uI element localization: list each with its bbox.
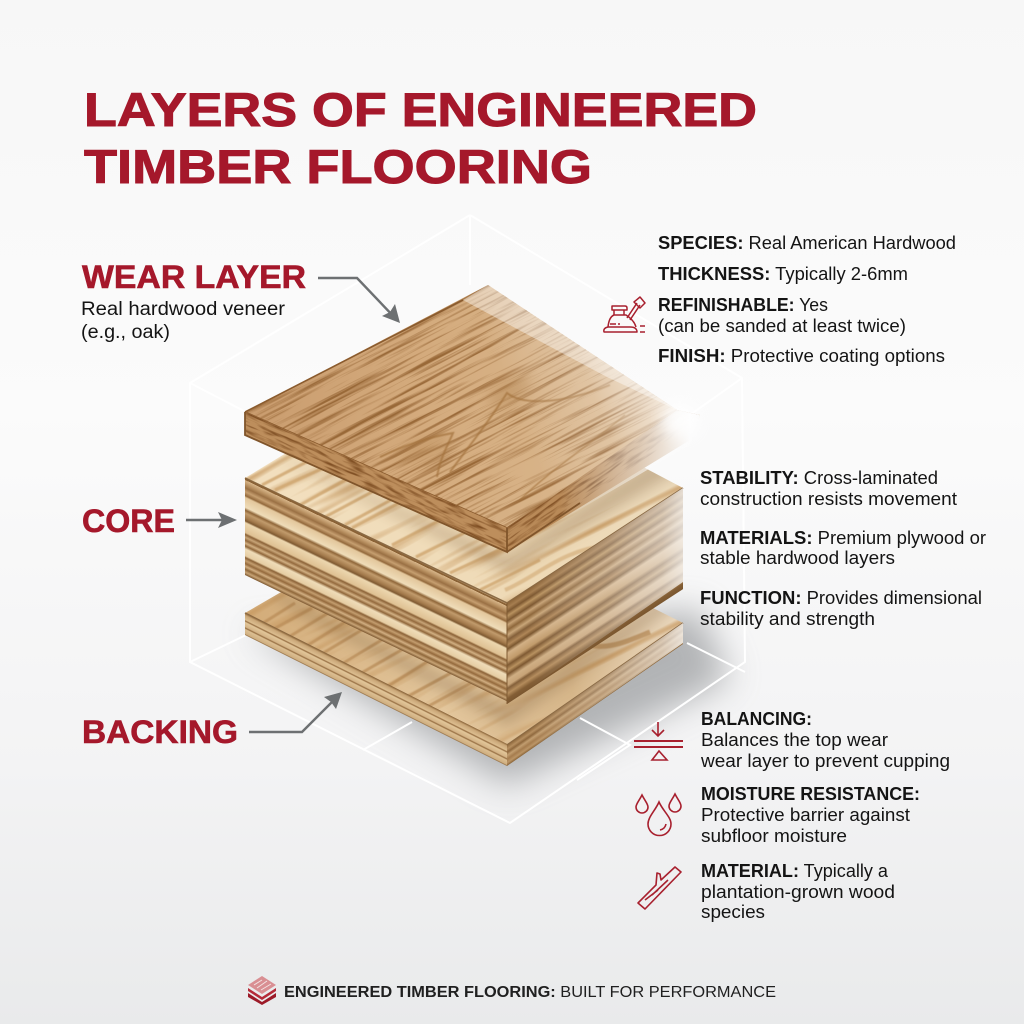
panel: backing details: wear layer to prevent cupping xyxy=(700,751,950,771)
panel: wear layer details: SPECIES: Real American Hardwood xyxy=(658,233,956,253)
label: core: CORE xyxy=(82,503,175,539)
panel: core details xyxy=(700,468,986,629)
panel: core details: stable hardwood layers xyxy=(700,548,895,568)
panel: wear layer details: (can be sanded at least twice) xyxy=(658,316,906,336)
panel: core details: MATERIALS: Premium plywood or xyxy=(700,528,986,548)
panel: core details: stability and strength xyxy=(700,609,875,629)
title: TIMBER FLOORING xyxy=(84,140,592,193)
panel: core details: construction resists movement xyxy=(700,489,957,509)
panel: wear layer details: FINISH: Protective coating options xyxy=(658,346,945,366)
label: wear layer xyxy=(81,259,306,343)
panel: backing details xyxy=(700,709,950,922)
shadow of wear layer on core xyxy=(315,468,671,575)
icon: water drops xyxy=(636,794,681,836)
label: wear layer: WEAR LAYER xyxy=(82,259,306,295)
label: backing: BACKING xyxy=(82,714,238,750)
panel: wear layer details xyxy=(658,233,956,366)
footer text: ENGINEERED TIMBER FLOORING: BUILT FOR PERFORMANCE xyxy=(284,984,776,1001)
footer xyxy=(248,976,776,1005)
panel: core details: STABILITY: Cross-laminated xyxy=(700,468,938,488)
backing layer board xyxy=(244,548,684,766)
panel: backing details: plantation-grown wood xyxy=(701,882,895,902)
icon: floor sander xyxy=(604,297,645,332)
icon: balancing xyxy=(634,722,683,760)
panel: wear layer details: REFINISHABLE: Yes xyxy=(658,295,828,315)
panel: backing details: BALANCING: xyxy=(701,709,812,729)
panel: wear layer details: THICKNESS: Typically 2-6mm xyxy=(658,264,908,284)
panel: backing details: Protective barrier against xyxy=(701,805,910,825)
panel: core details: FUNCTION: Provides dimensional xyxy=(700,588,982,608)
arrow: core xyxy=(186,512,237,528)
panel: backing details: MATERIAL: Typically a xyxy=(701,861,889,881)
shadow of core on backing xyxy=(272,592,669,727)
wood layer stack xyxy=(244,285,700,766)
label: wear layer: Real hardwood veneer xyxy=(81,299,286,320)
arrow: wear layer xyxy=(318,278,400,323)
panel: backing details: Balances the top wear xyxy=(701,730,888,750)
icon: wood branch xyxy=(638,867,681,909)
panel: backing details: subfloor moisture xyxy=(701,826,847,846)
title: LAYERS OF ENGINEERED xyxy=(84,83,757,136)
floor shadow xyxy=(245,610,730,785)
panel: backing details: species xyxy=(701,902,765,922)
panel: backing details: MOISTURE RESISTANCE: xyxy=(701,784,920,804)
icon: layered logo xyxy=(248,976,276,1005)
wireframe isometric cube xyxy=(190,215,745,823)
wear layer oak board xyxy=(244,285,700,554)
label: wear layer: (e.g., oak) xyxy=(81,322,170,343)
title xyxy=(84,83,757,193)
core layer block xyxy=(244,452,684,704)
arrow: backing xyxy=(249,692,342,732)
